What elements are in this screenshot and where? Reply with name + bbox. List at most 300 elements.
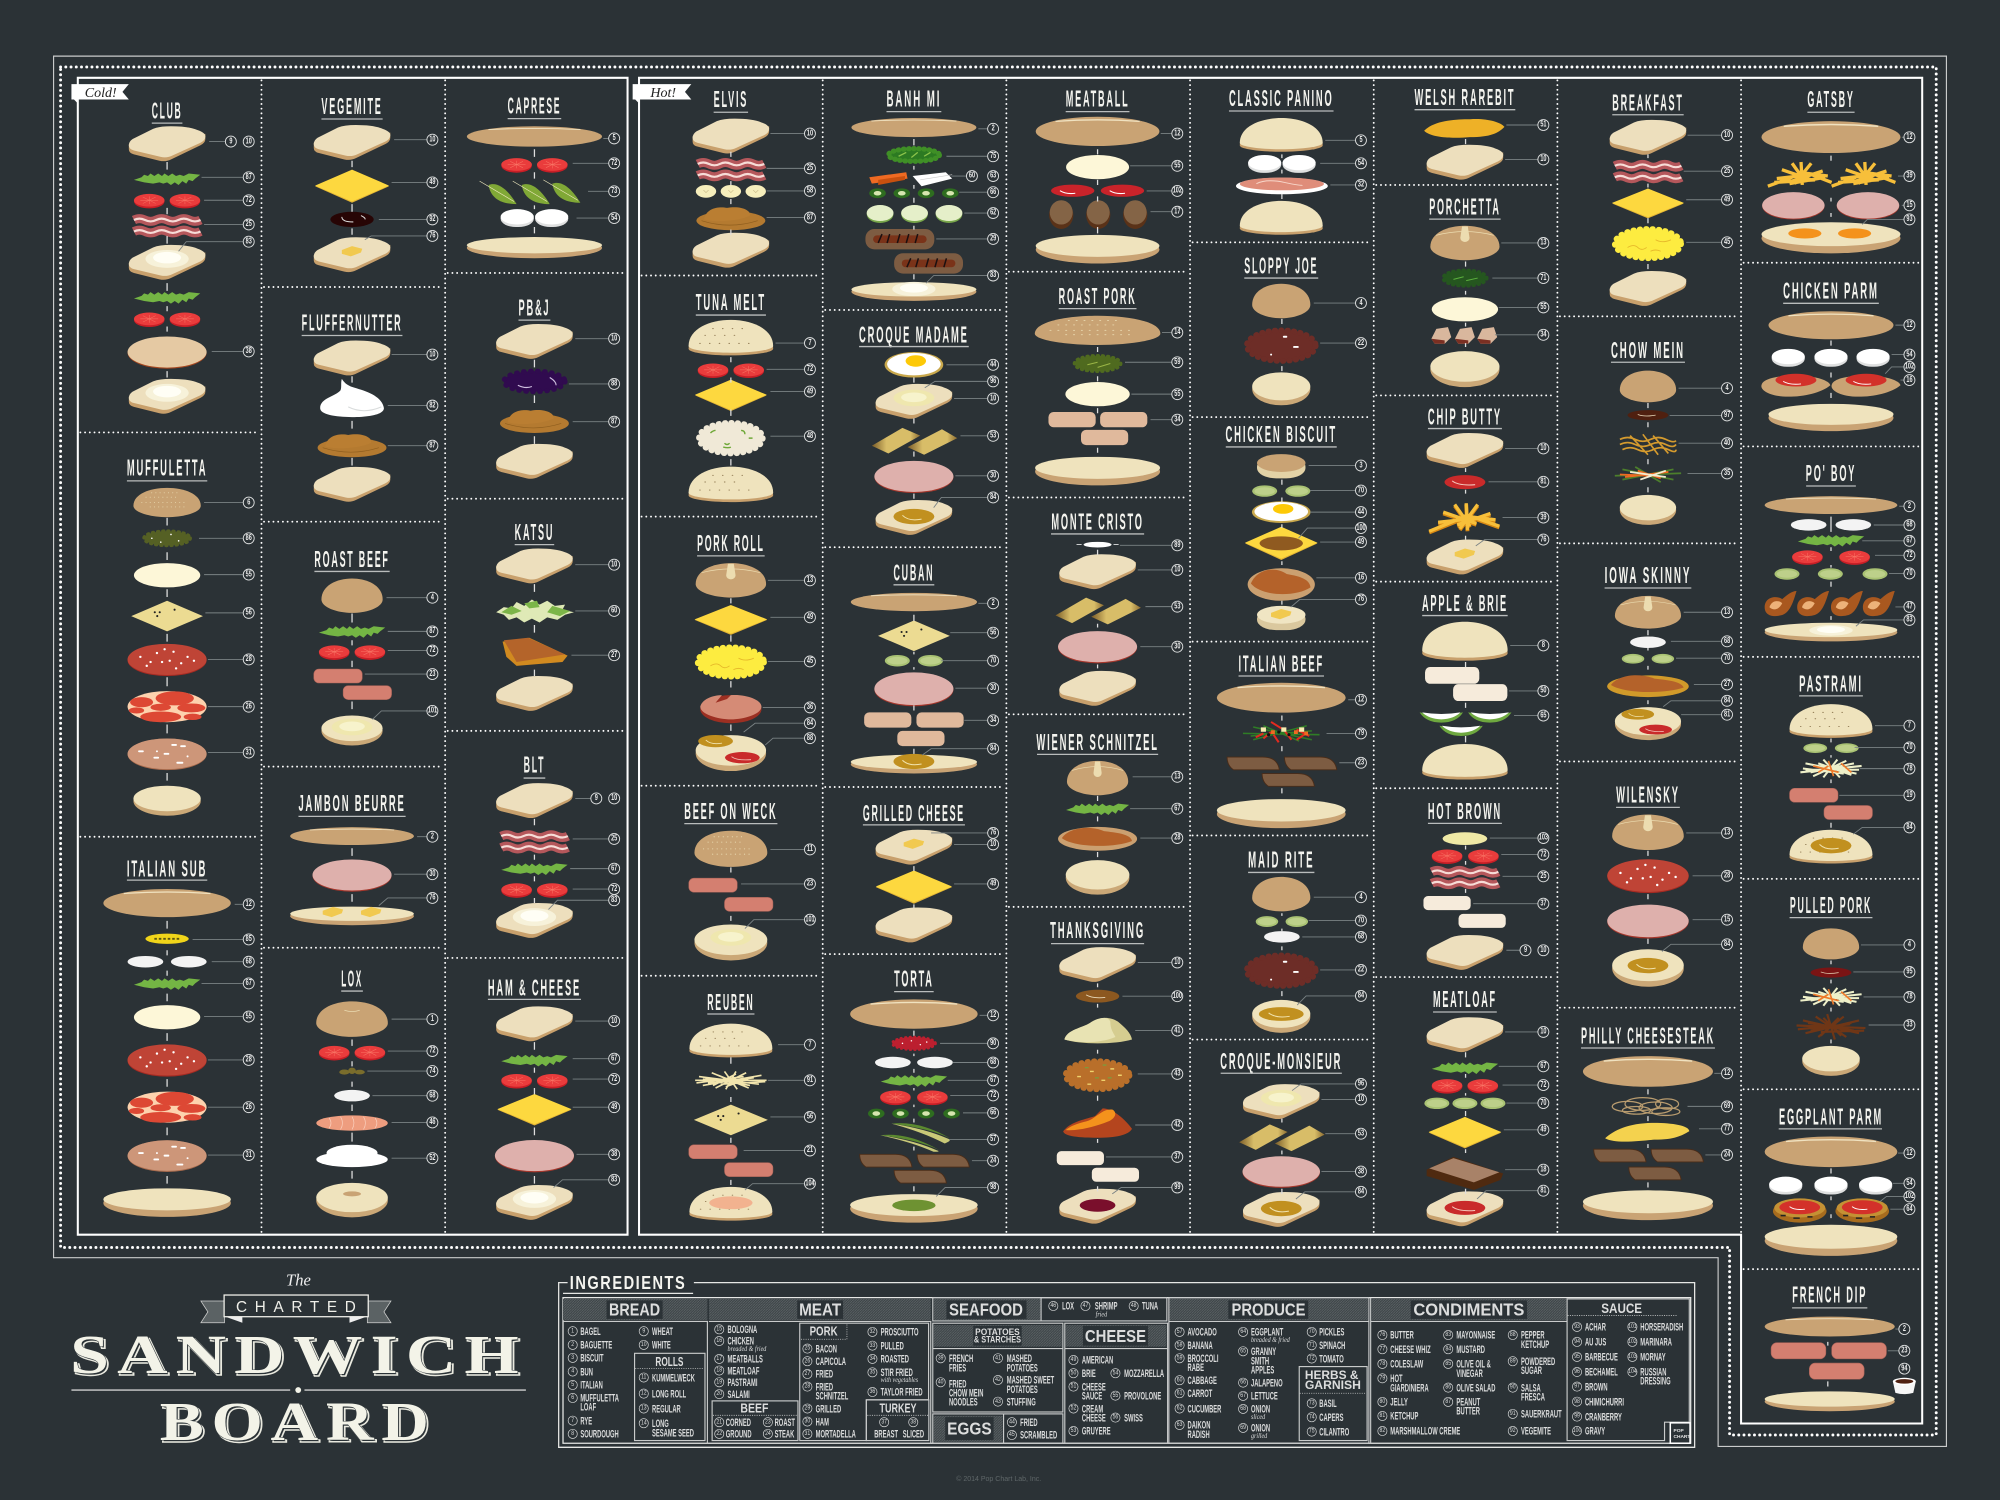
- section: condiments: 80: [1380, 1399, 1385, 1405]
- callouts: 100: [1173, 992, 1182, 1000]
- sandwich: Banh Mi: [851, 86, 999, 301]
- callouts: 7: [808, 1041, 812, 1049]
- callouts: 81: [1540, 1187, 1547, 1195]
- section: condiments: 83: [1445, 1332, 1451, 1338]
- sandwich: Po' Boy: PO' BOY: [1806, 460, 1856, 486]
- section: meat: [709, 1299, 931, 1443]
- section: condiments: HOT: [1390, 1372, 1403, 1385]
- legend frame: [559, 1283, 1695, 1447]
- logo: pop chart: POP: [1673, 1428, 1684, 1434]
- sandwich: Iowa Skinny: IOWA SKINNY: [1605, 562, 1691, 588]
- callouts: 70: [1540, 1099, 1547, 1107]
- callouts: 68: [1358, 933, 1364, 941]
- title: [314, 546, 390, 572]
- section: bread: 8: [571, 1431, 574, 1437]
- callouts: 54: [1906, 1179, 1913, 1187]
- callouts: [365, 592, 438, 719]
- section: pork: HAM: [816, 1415, 829, 1428]
- sandwich: Hot Brown: HOT BROWN: [1428, 798, 1502, 824]
- sandwich: Porchetta: [1429, 193, 1549, 387]
- section: pork: 33: [870, 1342, 875, 1349]
- callouts: [1880, 1148, 1915, 1215]
- callouts: 34: [990, 716, 996, 724]
- section: condiments: PEPPER: [1521, 1329, 1545, 1341]
- stack: [1615, 371, 1681, 525]
- callouts: 84: [1724, 697, 1730, 705]
- callouts: 12: [1724, 1069, 1730, 1077]
- callouts: 58: [807, 187, 813, 195]
- section: condiments: 85: [1445, 1361, 1451, 1367]
- stack: [1765, 1136, 1897, 1256]
- callouts: 15: [1906, 201, 1913, 209]
- callouts: 72: [1906, 551, 1913, 559]
- section: produce: TOMATO: [1319, 1352, 1344, 1365]
- callouts: 53: [1358, 1130, 1364, 1138]
- callouts: 5: [613, 134, 616, 142]
- callouts: 67: [611, 865, 617, 873]
- callouts: 102: [1173, 187, 1182, 195]
- section: bread: ITALIAN: [580, 1379, 603, 1391]
- sandwich: Muffuletta: MUFFULETTA: [127, 455, 207, 481]
- callouts: 87: [429, 442, 436, 450]
- stack: [851, 118, 976, 301]
- section: meat: 19: [716, 1379, 722, 1386]
- callouts: 77: [1724, 1125, 1730, 1133]
- section: turkey: TURKEY: [879, 1401, 917, 1416]
- section: pork: BACON: [816, 1342, 837, 1355]
- stack: [1424, 1017, 1505, 1226]
- callouts: 83: [990, 271, 996, 280]
- title: [1790, 892, 1872, 918]
- section: pork: SCHNITZEL: [816, 1390, 849, 1402]
- callouts: 50: [1540, 687, 1547, 695]
- callouts: 26: [246, 703, 252, 711]
- callouts: 87: [611, 418, 617, 426]
- title: [886, 86, 941, 112]
- section: potatoes & starches: MASHED SWEET: [1007, 1374, 1055, 1386]
- callouts: 69: [1724, 1102, 1730, 1110]
- callouts: [1684, 130, 1733, 248]
- section: potatoes & starches: 41: [995, 1355, 1001, 1362]
- sandwich: Wiener Schnitzel: [1036, 729, 1183, 895]
- callouts: 68: [1724, 637, 1730, 645]
- callouts: 32: [1358, 181, 1364, 189]
- callouts: 82: [429, 402, 436, 410]
- callouts: 13: [1724, 829, 1730, 837]
- stack: [850, 999, 978, 1223]
- section: condiments: BUTTER: [1456, 1405, 1480, 1417]
- section: potatoes & starches: [933, 1323, 1063, 1412]
- section: potatoes & starches: POTATOES: [1007, 1383, 1038, 1396]
- callouts: [1839, 720, 1915, 834]
- banner: charted: [201, 1295, 391, 1323]
- callouts: [922, 598, 999, 755]
- callouts: 59: [1174, 358, 1181, 366]
- callouts: 102: [1905, 363, 1914, 371]
- sandwich: Grilled Cheese: GRILLED CHEESE: [863, 800, 965, 826]
- callouts: 67: [990, 1076, 996, 1084]
- section: rolls: KUMMELWECK: [652, 1371, 695, 1384]
- sandwich: Sloppy Joe: [1244, 253, 1366, 405]
- callouts: [1888, 1324, 1910, 1374]
- stack: [695, 563, 767, 771]
- sandwich: Caprese: [467, 93, 620, 258]
- callouts: 36: [807, 703, 813, 711]
- title: [893, 559, 934, 585]
- flag: Hot: Hot!: [649, 85, 676, 101]
- section: produce: 63: [1177, 1422, 1182, 1428]
- stack: [1607, 815, 1689, 987]
- stack: [872, 352, 957, 535]
- stack: [314, 125, 390, 272]
- callouts: 10: [807, 129, 813, 138]
- callouts: 49: [429, 178, 436, 186]
- title: [321, 93, 383, 119]
- callouts: [1688, 1068, 1733, 1160]
- stack: [1583, 1056, 1713, 1220]
- section: seafood: LOX: [1062, 1300, 1074, 1312]
- section: bread: BISCUIT: [580, 1352, 604, 1364]
- callouts: 49: [990, 880, 996, 888]
- sandwich: Gatsby: [1761, 86, 1915, 253]
- callouts: 3: [1359, 462, 1363, 470]
- callouts: 55: [1174, 162, 1181, 170]
- callouts: 70: [1906, 569, 1913, 578]
- callouts: 72: [1540, 1081, 1547, 1089]
- section: pork: 29: [805, 1405, 810, 1412]
- sandwich wordmark: SANDWICH: [70, 1324, 527, 1385]
- section: cheese: 52: [1071, 1405, 1076, 1412]
- callouts: 17: [1174, 208, 1181, 216]
- section: produce: APPLES: [1251, 1364, 1274, 1376]
- section: sauce: 101: [1628, 1324, 1637, 1330]
- sandwich: Meatball: [1036, 86, 1183, 263]
- section: produce: 67: [1240, 1393, 1246, 1399]
- sandwich: Wilensky: [1607, 781, 1733, 987]
- section: sauce: BARBECUE: [1585, 1351, 1618, 1363]
- section: herbs & garnish: 74: [1309, 1414, 1315, 1421]
- sandwich: Fluffernutter: [302, 309, 438, 502]
- callouts: 10: [990, 395, 996, 403]
- section: turkey: SLICED: [903, 1428, 924, 1440]
- section: turkey: 37: [881, 1419, 887, 1426]
- callouts: [1291, 460, 1366, 607]
- sandwich: Jambon Beurre: JAMBON BEURRE: [298, 790, 406, 816]
- callouts: 84: [1358, 992, 1364, 1000]
- section: sauce: HORSERADISH: [1640, 1321, 1683, 1333]
- callouts: 9: [1524, 946, 1527, 954]
- section: pork: CAPICOLA: [816, 1355, 846, 1367]
- section: produce: 71: [1309, 1342, 1315, 1349]
- title: [127, 455, 207, 481]
- section: produce: 60: [1177, 1377, 1182, 1384]
- section: condiments: VEGEMITE: [1521, 1425, 1551, 1437]
- title: [696, 289, 766, 315]
- section: herbs & garnish: CILANTRO: [1319, 1425, 1349, 1438]
- callouts: [1662, 827, 1733, 952]
- section: meat: 17: [716, 1356, 722, 1362]
- stack: [1217, 683, 1346, 828]
- title: [1806, 460, 1856, 486]
- callouts: 84: [807, 719, 813, 727]
- callouts: 103: [1539, 834, 1548, 842]
- section: pork: PORK: [810, 1324, 838, 1339]
- sandwich: Monte Cristo: [1051, 508, 1183, 706]
- callouts: 14: [1174, 328, 1181, 337]
- logo: pop chart: [1670, 1423, 1690, 1443]
- the: The: [286, 1271, 311, 1290]
- section: potatoes & starches: 43: [995, 1398, 1001, 1405]
- callouts: 97: [1724, 411, 1730, 419]
- section: pork: GRILLED: [816, 1402, 841, 1415]
- section: condiments: 78: [1380, 1361, 1385, 1367]
- callouts: 45: [1724, 238, 1730, 246]
- stack: [1424, 119, 1504, 180]
- section: beef: CORNED: [726, 1416, 751, 1428]
- legend title: INGREDIENTS: [570, 1272, 686, 1293]
- callouts: 104: [805, 1180, 815, 1188]
- section: bread: 4: [571, 1368, 575, 1375]
- callouts: 87: [429, 627, 436, 635]
- stack: [495, 1006, 574, 1220]
- stack: [689, 320, 773, 502]
- sandwich: Classic Panino: [1229, 85, 1366, 235]
- sandwich: Croque Madame: [859, 321, 999, 535]
- callouts: 75: [990, 152, 996, 160]
- sandwich: Pork Roll: PORK ROLL: [697, 530, 765, 556]
- sandwich: Maid Rite: MAID RITE: [1248, 846, 1314, 872]
- callouts: 10: [611, 561, 617, 569]
- sandwich: Gatsby: GATSBY: [1807, 86, 1855, 112]
- callouts: 76: [990, 829, 996, 837]
- section: sauce: BROWN: [1585, 1380, 1608, 1393]
- title: [341, 966, 363, 992]
- section: herbs & garnish: GARNISH: [1305, 1378, 1361, 1392]
- sandwich: Roast Pork: [1035, 283, 1183, 485]
- callouts: 78: [1906, 993, 1913, 1001]
- section: cheese: 49: [1071, 1357, 1076, 1363]
- section: pork: with vegetables: [881, 1377, 918, 1384]
- sandwich: Pulled Pork: PULLED PORK: [1790, 892, 1872, 918]
- section: bread: 9: [642, 1328, 645, 1335]
- callouts: 66: [990, 1109, 996, 1117]
- callouts: 33: [1906, 1021, 1913, 1029]
- stack: [689, 831, 773, 960]
- section: sauce: 94: [1574, 1339, 1581, 1345]
- sandwich: Italian Beef: [1217, 651, 1366, 828]
- sandwich: Chow Mein: [1611, 337, 1733, 525]
- callouts: 72: [990, 1091, 996, 1099]
- section: potatoes & starches: MASHED: [1007, 1352, 1032, 1365]
- title: [1225, 421, 1337, 447]
- section: potatoes & starches: 40: [938, 1379, 944, 1386]
- section: cheese: SAUCE: [1082, 1389, 1102, 1402]
- callouts: 34: [1540, 331, 1547, 339]
- sandwich: Ham & Cheese: [488, 975, 620, 1220]
- callouts: 23: [1358, 759, 1364, 767]
- callouts: 10: [1540, 155, 1547, 163]
- title: [508, 93, 561, 119]
- stack: [1247, 284, 1316, 405]
- section: herbs & garnish: BASIL: [1319, 1397, 1337, 1410]
- section: produce: breaded & fried: [1251, 1337, 1290, 1344]
- section: pork: 26: [805, 1358, 810, 1365]
- callouts: 34: [1174, 416, 1181, 424]
- callouts: 90: [990, 1039, 996, 1047]
- callouts: 92: [429, 215, 436, 223]
- sandwich: Lox: LOX: [341, 966, 363, 992]
- callouts: 23: [1901, 1347, 1908, 1355]
- section: produce: 65: [1240, 1348, 1246, 1355]
- callouts: 12: [990, 1011, 996, 1019]
- callouts: 100: [1356, 524, 1366, 532]
- callouts: 96: [1358, 1080, 1364, 1088]
- section: produce: 64: [1240, 1329, 1247, 1335]
- sandwich: Chicken Biscuit: [1225, 421, 1366, 630]
- callouts: [1120, 540, 1183, 652]
- sandwich: BLT: [496, 751, 620, 938]
- section: condiments: 86: [1445, 1384, 1451, 1391]
- stack: [876, 830, 952, 942]
- callouts: 89: [1174, 541, 1181, 549]
- flag: Cold: Cold!: [85, 85, 117, 101]
- section: bread: MUFFULETTA: [580, 1392, 619, 1404]
- sandwich: Chow Mein: CHOW MEIN: [1611, 337, 1685, 363]
- callouts: 54: [1906, 351, 1913, 359]
- sandwich: Italian Sub: [103, 855, 254, 1217]
- sandwich: Pulled Pork: [1790, 892, 1915, 1076]
- section: pork: 35: [870, 1369, 875, 1376]
- title: [859, 321, 969, 347]
- stack: [1236, 118, 1328, 235]
- title: [1612, 89, 1684, 115]
- board wordmark: BOARD: [160, 1391, 437, 1452]
- callouts: 98: [990, 1183, 996, 1192]
- title: [1799, 670, 1863, 696]
- section: pork: 36: [870, 1389, 875, 1395]
- stack: [1423, 832, 1506, 970]
- callouts: 84: [990, 493, 996, 502]
- sandwich: Meatloaf: [1424, 986, 1549, 1226]
- callouts: [936, 1010, 999, 1196]
- stack: [1036, 117, 1159, 263]
- callouts: 63: [990, 172, 996, 180]
- callouts: 87: [246, 173, 252, 181]
- title: [518, 295, 550, 321]
- callouts: 10: [246, 138, 252, 146]
- callouts: 70: [1358, 916, 1364, 925]
- section: pork: [800, 1323, 929, 1441]
- section: sauce: CHIMICHURRI: [1585, 1395, 1624, 1408]
- sandwich: Italian Sub: ITALIAN SUB: [127, 855, 207, 881]
- callouts: 28: [1724, 872, 1730, 880]
- section: cheese: 55: [1113, 1392, 1118, 1399]
- stack: [467, 126, 602, 258]
- section: produce: grilled: [1251, 1433, 1268, 1440]
- callouts: 13: [1174, 773, 1181, 781]
- section: bread: SOURDOUGH: [580, 1428, 619, 1440]
- sandwich: Chicken Parm: [1761, 277, 1915, 431]
- callouts: 72: [807, 365, 813, 373]
- section: pork: FRIED: [816, 1380, 833, 1393]
- section: condiments: 89: [1510, 1358, 1516, 1365]
- sandwich: Breakfast: [1610, 89, 1733, 306]
- section: turkey: 38: [910, 1419, 916, 1426]
- callouts: 28: [1174, 834, 1181, 842]
- title: [1792, 1281, 1867, 1308]
- section: eggs: [933, 1414, 1063, 1443]
- sandwich: PB&J: PB&J: [518, 295, 550, 321]
- section: pork: 31: [805, 1431, 810, 1437]
- rule: [71, 1387, 526, 1393]
- callouts: 23: [807, 880, 813, 888]
- callouts: 70: [1358, 487, 1364, 495]
- section: herbs & garnish: HERBS &: [1305, 1368, 1359, 1382]
- title: [1616, 781, 1680, 807]
- section: condiments: MAYONNAISE: [1456, 1329, 1495, 1341]
- section: condiments: 77: [1380, 1346, 1385, 1353]
- section: cheese: CHEESE: [1082, 1411, 1106, 1424]
- callouts: 10: [1358, 1095, 1364, 1104]
- sandwich: Grilled Cheese: [863, 800, 999, 942]
- section: produce: JALAPENO: [1251, 1376, 1283, 1389]
- section: meat: SALAMI: [728, 1388, 750, 1400]
- sandwich: Welsh Rarebit: WELSH RAREBIT: [1415, 84, 1515, 110]
- callouts: 55: [246, 571, 252, 579]
- callouts: [1663, 607, 1733, 720]
- section: potatoes & starches: FRENCH: [949, 1352, 973, 1365]
- callouts: 10: [1724, 131, 1730, 139]
- text: PHILLY CHEESESTEAK: [1581, 1022, 1715, 1048]
- callouts: [741, 844, 815, 929]
- callouts: [925, 359, 999, 508]
- callouts: 31: [246, 1151, 252, 1159]
- callouts: 30: [990, 472, 996, 480]
- callouts: 56: [246, 609, 252, 617]
- title: [714, 86, 748, 112]
- callouts: 83: [246, 238, 252, 246]
- section: cheese: AMERICAN: [1082, 1354, 1113, 1366]
- callouts: 8: [1542, 641, 1545, 649]
- stack: [1765, 1317, 1916, 1411]
- section: condiments: JELLY: [1390, 1396, 1408, 1408]
- callouts: 73: [611, 187, 617, 195]
- section: meat: MEATBALLS: [728, 1353, 763, 1365]
- callouts: 78: [1906, 765, 1913, 773]
- sandwich: Chip Butty: [1427, 404, 1549, 574]
- callouts: 70: [990, 657, 996, 665]
- callouts: 72: [246, 196, 252, 204]
- stack: [496, 324, 573, 479]
- callouts: 19: [1906, 791, 1913, 799]
- section: produce: ONION: [1251, 1403, 1270, 1415]
- stack: [128, 126, 207, 414]
- sandwich: Katsu: [496, 519, 620, 711]
- callouts: 72: [611, 885, 617, 893]
- section: turkey: [866, 1400, 929, 1441]
- callouts: 24: [990, 1157, 996, 1165]
- title: [697, 530, 765, 556]
- section: sauce: 103: [1628, 1354, 1637, 1360]
- callouts: 83: [611, 896, 617, 904]
- section: meat: 18: [716, 1367, 722, 1374]
- section: pork: ROASTED: [881, 1353, 909, 1365]
- ingredients legend: [559, 1272, 1695, 1447]
- callouts: 62: [990, 209, 996, 217]
- callouts: [365, 134, 438, 241]
- section: bread: BREAD: [609, 1300, 660, 1320]
- callouts: 68: [429, 1092, 436, 1100]
